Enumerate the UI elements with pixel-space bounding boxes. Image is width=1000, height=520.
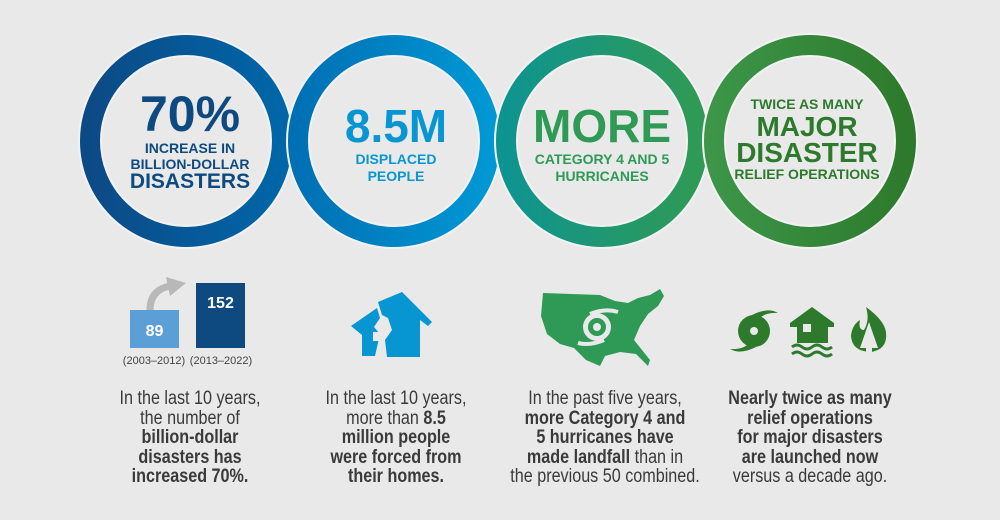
text: column 1: the number of [140,408,240,428]
text: column 3: In the past five years, [528,388,682,409]
text: column 2: their homes. [348,466,444,487]
text: column 2: million people [342,427,450,448]
circle 1 text [130,86,250,193]
circle 4 text: DISASTER [736,137,878,168]
circle 1 text: 70% [140,86,240,142]
text: column 2: were forced from [330,446,462,468]
bar chart: 89 [146,323,164,340]
text: column 3: the previous 50 combined. [510,466,700,487]
ring 2 [298,45,490,237]
circle 2 text: PEOPLE [368,168,424,184]
text: column 2: In the last 10 years, [326,388,466,409]
text: column 3: more Category 4 and [525,408,685,428]
circle 1 text: BILLION-DOLLAR [131,156,249,172]
circle 2 text: DISPLACED [356,151,436,167]
icon: US map with hurricane [541,289,664,366]
text: column 1 [120,388,260,487]
ring 4 [714,45,906,237]
circle 3 text: MORE [533,100,671,152]
circle 2 text [345,100,447,184]
text: column 4: relief operations [747,408,873,428]
text: column 4 [728,388,892,487]
text: column 4: Nearly twice as many [728,388,892,409]
text: column 2: more than 8.5 [346,408,446,428]
icon: broken house [351,292,432,357]
text: column 3 [510,388,700,487]
text: column 3: made landfall than in [527,446,683,468]
bar chart: 152 [207,295,234,312]
circle 4 text: RELIEF OPERATIONS [734,166,880,182]
circle 3 text: CATEGORY 4 AND 5 [535,151,669,167]
icon: wildfire [851,307,886,354]
text: column 2 [326,388,466,487]
ring 1 [90,45,282,237]
circle 2 text: 8.5M [345,100,447,152]
text: column 3: 5 hurricanes have [536,427,674,448]
circle 4 text: TWICE AS MANY [750,96,864,112]
circle 1 text: DISASTERS [130,170,250,193]
bar chart: (2003–2012) [123,355,185,367]
bar chart [123,277,252,367]
text: column 1: In the last 10 years, [120,388,260,409]
icon: flooded house [790,307,834,356]
ring 3 [506,45,698,237]
circle 3 text: HURRICANES [555,168,649,184]
text: column 4: are launched now [742,446,878,468]
text: column 4: versus a decade ago. [733,466,887,487]
icon: hurricane [730,310,778,352]
text: column 1: increased 70%. [132,466,248,487]
circle 4 text [734,96,880,182]
bar chart: (2013–2022) [190,355,252,367]
text: column 4: for major disasters [737,427,883,448]
text: column 1: disasters has [138,446,242,468]
circle 3 text [533,100,671,184]
text: column 1: billion-dollar [142,427,238,448]
circle 4 text: MAJOR [756,111,858,142]
circle 1 text: INCREASE IN [145,140,235,156]
